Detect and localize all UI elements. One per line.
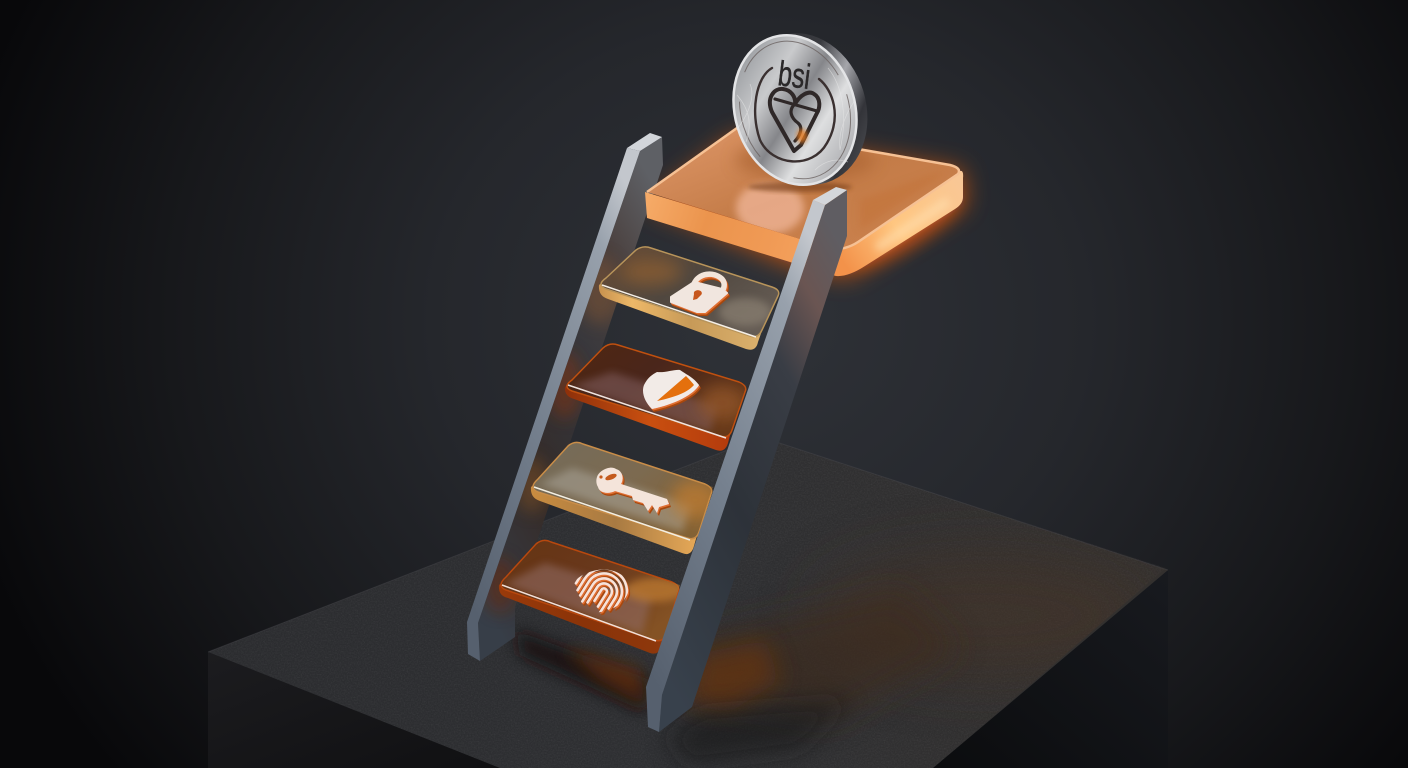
tray top	[601, 247, 779, 337]
tray top	[533, 442, 712, 539]
coin shadow	[748, 182, 852, 192]
bsi wordmark: bsi	[776, 54, 813, 97]
coin inner ring	[755, 68, 835, 161]
rail dark side	[478, 137, 663, 661]
rail lit face	[467, 148, 640, 661]
pedestal	[208, 437, 1168, 768]
tray highlight	[502, 585, 656, 641]
tray front edge	[499, 575, 668, 654]
coin edge	[722, 17, 886, 201]
platform front edge	[645, 192, 855, 275]
platform gloss	[880, 203, 945, 246]
rail dark side	[659, 190, 847, 732]
left ladder rail	[467, 133, 663, 661]
step 4: fingerprint tray	[499, 540, 685, 654]
top platform	[645, 128, 963, 276]
platform right edge	[825, 171, 963, 276]
tray front edge	[565, 375, 734, 451]
icon: shield	[643, 370, 699, 409]
coin: bsi kitemark	[715, 17, 886, 201]
platform corner glow	[844, 186, 966, 278]
rail top cap	[813, 187, 847, 205]
platform glow	[647, 135, 966, 278]
pedestal top face	[208, 437, 1168, 768]
orange reflection and shadows on pedestal	[208, 437, 1168, 768]
step 3: key tray	[531, 442, 719, 554]
pedestal left face	[208, 652, 500, 768]
tray highlight	[534, 487, 690, 540]
platform rim highlight	[647, 128, 959, 250]
step 1: lock tray	[599, 247, 779, 350]
tray highlight	[568, 385, 726, 438]
right ladder rail	[646, 187, 847, 732]
rail reflections	[484, 256, 622, 613]
icon: key	[596, 468, 669, 513]
pedestal right face	[933, 570, 1168, 768]
kitemark heart	[770, 89, 819, 151]
tray front edge	[531, 475, 700, 554]
tray front edge	[599, 273, 765, 350]
platform top face	[647, 128, 959, 250]
rail lit face	[646, 200, 825, 732]
pedestal edge highlight	[208, 437, 1168, 652]
tray top	[567, 344, 746, 437]
icon: fingerprint	[574, 570, 630, 616]
kitemark glow	[797, 129, 807, 143]
rail top cap	[627, 133, 662, 151]
coin engraved lines	[737, 68, 855, 170]
tray highlight	[602, 285, 756, 337]
coin outer ring	[723, 27, 867, 193]
tray top	[501, 540, 679, 641]
icon: padlock	[671, 274, 727, 312]
coin face	[715, 20, 875, 200]
step 2: shield tray	[565, 344, 746, 451]
